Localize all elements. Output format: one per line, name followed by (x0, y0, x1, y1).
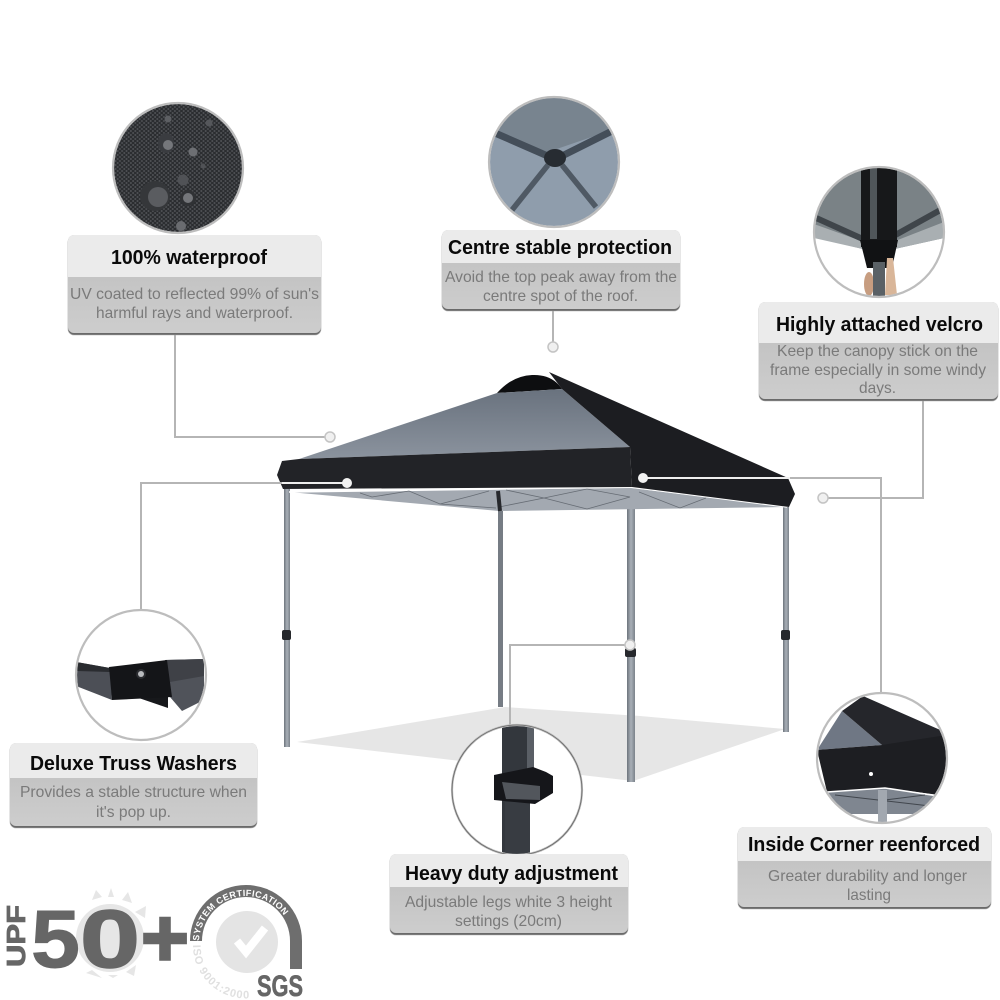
photo: velcro on frame (814, 167, 944, 298)
icon: check mark seal (216, 911, 278, 973)
card: UV coated to reflected 99% of sun's (70, 286, 319, 303)
photo: water droplets on fabric (110, 100, 246, 236)
canopy roof grey face (299, 389, 630, 459)
connector: velcro (818, 400, 923, 503)
card: it's pop up. (96, 804, 171, 821)
card: centre spot of the roof. (483, 288, 638, 305)
card: days. (859, 380, 896, 397)
panel: highly attached velcro (759, 167, 998, 401)
card: 100% waterproof (111, 247, 267, 269)
card (759, 302, 998, 401)
card (738, 827, 991, 909)
canopy top vent (497, 375, 562, 393)
photo: reinforced corner (817, 693, 947, 823)
card: Inside Corner reenforced (748, 834, 980, 856)
panel: heavy duty adjustment (390, 725, 628, 935)
card: Highly attached velcro (776, 314, 983, 336)
card (68, 235, 321, 335)
card (10, 743, 257, 828)
badge: UPF 50+: UPF (1, 905, 31, 967)
tent legs (282, 489, 790, 782)
card (390, 854, 628, 935)
canopy tent (277, 372, 795, 782)
canopy underside with truss (289, 487, 787, 511)
card (442, 230, 680, 311)
card: Heavy duty adjustment (405, 863, 618, 885)
card: harmful rays and waterproof. (96, 305, 293, 322)
card: settings (20cm) (455, 913, 562, 930)
photo: truss washer (76, 610, 206, 740)
badge: SGS system certification: ISO 9001:2000 (193, 945, 249, 998)
panel: inside corner reenforced (738, 693, 991, 909)
card: Provides a stable structure when (20, 784, 247, 801)
badge: UPF 50+ (1, 888, 189, 985)
photo: leg adjustment clamp (452, 725, 582, 855)
card: Greater durability and longer (768, 868, 968, 885)
card: Deluxe Truss Washers (30, 753, 237, 775)
badge: UPF 50+: 0 (80, 894, 140, 985)
connector: adjustment (510, 640, 635, 725)
icon: sun rays (76, 888, 146, 978)
connector: truss washers (141, 478, 352, 610)
panel: 100% waterproof (68, 100, 321, 335)
ground shadow (297, 707, 785, 781)
badge: SGS system certification (190, 885, 303, 1000)
card: Adjustable legs white 3 height (405, 894, 613, 911)
canopy roof dark side (549, 372, 795, 507)
card: Centre stable protection (448, 237, 672, 259)
connector: waterproof (175, 334, 335, 442)
canopy front valance (277, 447, 632, 489)
card: lasting (847, 887, 891, 904)
photo: centre hub (488, 96, 620, 228)
badge: SGS system certification: SYSTEM CERTIFICATION (192, 890, 288, 941)
panel: deluxe truss washers (10, 610, 257, 828)
badge: UPF 50+: 5 (31, 894, 80, 985)
panel: centre stable protection (442, 96, 680, 311)
card: Avoid the top peak away from the (445, 269, 677, 286)
badge: UPF 50+: + (141, 893, 189, 984)
connector: centre protection (548, 310, 558, 352)
card: Keep the canopy stick on the (777, 343, 978, 360)
connector: inside corner (638, 473, 881, 693)
card: frame especially in some windy (770, 362, 986, 379)
